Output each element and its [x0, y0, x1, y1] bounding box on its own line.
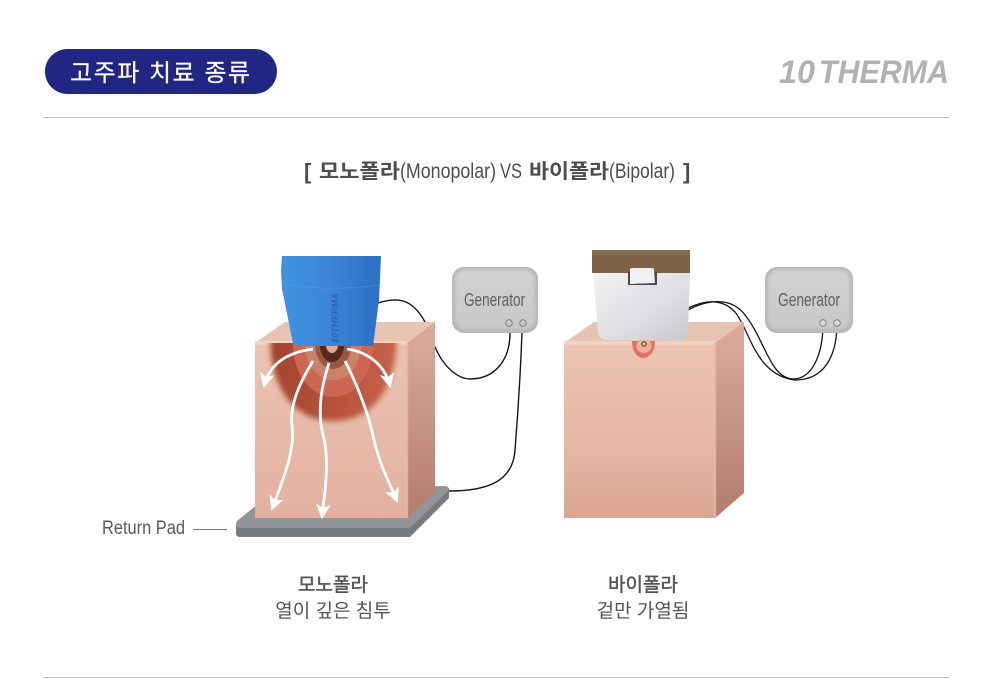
caption: monopolar: 모노폴라 [298, 574, 368, 596]
subtitle: VS [500, 160, 522, 183]
logo: THERMA [819, 54, 949, 90]
caption: bipolar: 겉만 가열됨 [597, 600, 689, 622]
caption: monopolar [275, 574, 391, 622]
subtitle: (Monopolar) [400, 160, 496, 183]
skin block [255, 322, 435, 518]
superficial heat spot [632, 339, 655, 358]
subtitle: 바이폴라 [529, 160, 609, 183]
title pill: 고주파 치료 종류 [70, 60, 250, 87]
wire: handpiece to generator [378, 300, 510, 379]
blue handpiece [281, 256, 381, 346]
subtitle: ] [683, 159, 690, 184]
generator [765, 267, 853, 333]
subtitle [304, 159, 690, 184]
subtitle: [ [304, 159, 312, 184]
top divider [44, 117, 949, 118]
caption: monopolar: 열이 깊은 침투 [275, 600, 391, 622]
generator: Generator [464, 290, 525, 310]
logo: 10 [779, 54, 815, 90]
title pill [45, 49, 277, 94]
monopolar diagram [236, 256, 538, 537]
heat zone [266, 343, 401, 425]
return pad [236, 486, 449, 537]
return pad label: Return Pad [102, 518, 185, 539]
wires to generator [688, 302, 837, 380]
generator [452, 267, 538, 333]
wire: generator to return pad [449, 333, 522, 491]
generator: Generator [778, 290, 840, 310]
caption: bipolar: 바이폴라 [608, 574, 678, 596]
bottom divider [44, 677, 949, 678]
skin block [564, 322, 744, 518]
heat current arrows [264, 349, 397, 517]
subtitle: (Bipolar) [609, 160, 675, 183]
subtitle: 모노폴라 [319, 160, 400, 183]
white handpiece [592, 250, 690, 340]
blue handpiece: 10THERMA [330, 293, 340, 343]
caption: bipolar [597, 574, 689, 622]
bipolar diagram [564, 250, 853, 518]
